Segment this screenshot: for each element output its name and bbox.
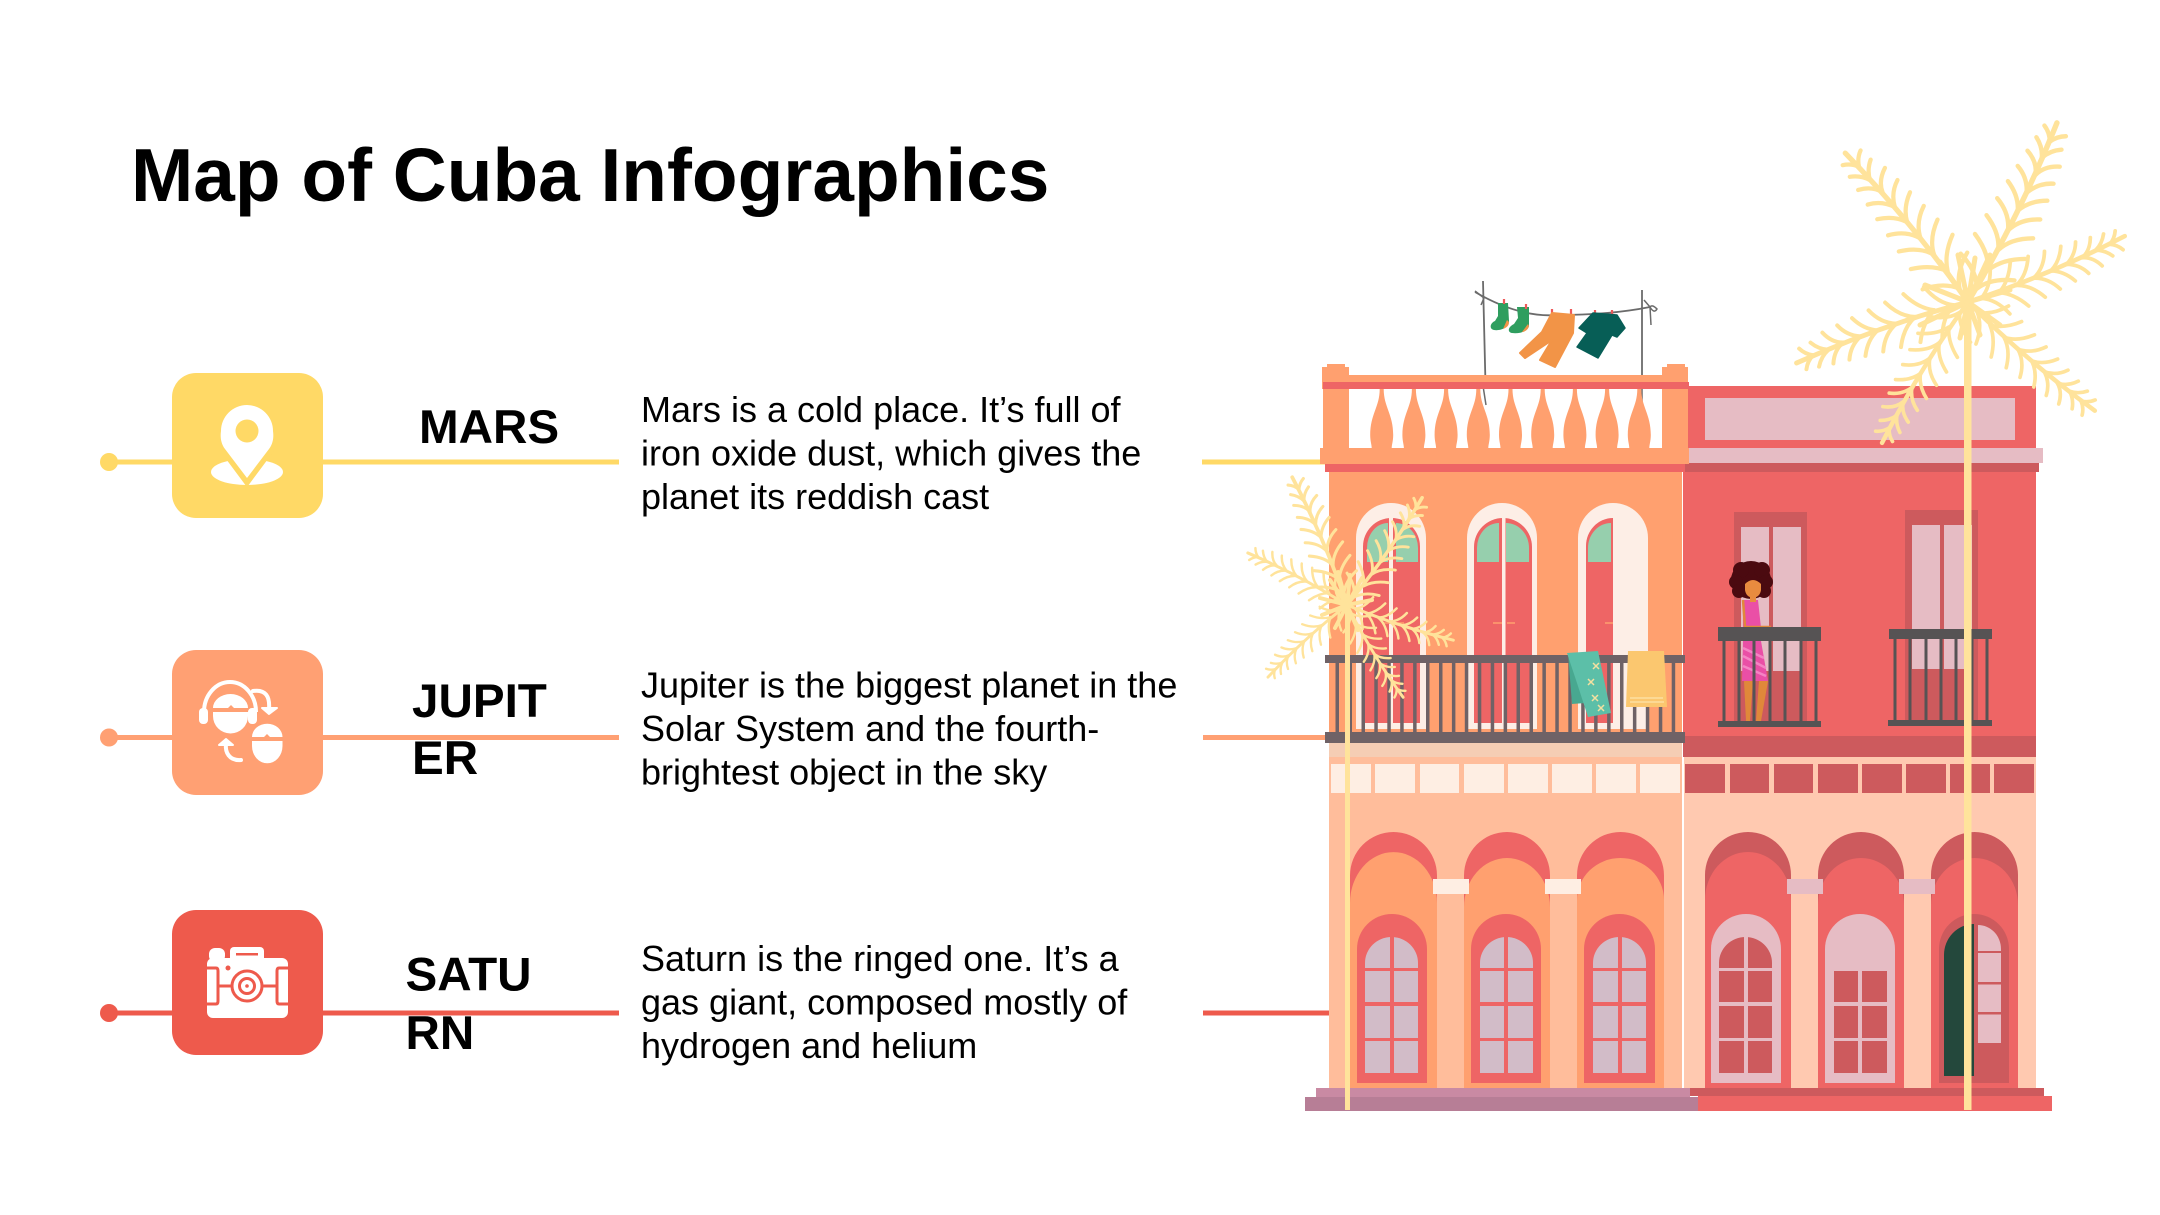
steps	[1305, 1088, 2052, 1111]
arched door 1	[1356, 503, 1426, 729]
icon: headset swap	[172, 650, 323, 795]
orange building: upper floor	[1325, 472, 1685, 743]
heading: Mars: MARS	[419, 401, 559, 454]
text: Mars description: Mars is a cold place. It’s full of	[641, 389, 1122, 430]
text: Jupiter description: Solar System and the fourth-	[641, 708, 1099, 749]
heading: Saturn: RN	[406, 1007, 474, 1060]
balcony railing left	[1718, 627, 1821, 727]
arched window 1	[1711, 914, 1781, 1083]
text: Mars description: planet its reddish cast	[641, 476, 989, 517]
arched window 3	[1584, 914, 1655, 1083]
orange building: balustrade parapet	[1320, 364, 1689, 472]
open door	[1939, 914, 2009, 1083]
heading: Jupiter: ER	[412, 732, 478, 785]
icon: camera	[172, 910, 323, 1055]
towel yellow	[1626, 651, 1667, 707]
palm tree: small	[1241, 468, 1458, 1110]
orange building: ground floor	[1329, 743, 1682, 1088]
arched door 3	[1578, 503, 1648, 729]
text: Saturn description: Saturn is the ringed one. It’s a	[641, 938, 1120, 979]
connector line: Mars left	[100, 453, 619, 471]
heading: Saturn: SATU	[406, 948, 532, 1002]
arched door 2	[1467, 503, 1537, 729]
arches	[1705, 832, 2018, 1088]
balcony railing	[1325, 655, 1685, 743]
connector line: Saturn right	[1203, 1010, 1331, 1016]
text: Jupiter description: brightest object in the sky	[641, 751, 1047, 792]
text: Mars description: iron oxide dust, which gives the	[641, 432, 1141, 473]
clothesline with laundry	[1475, 281, 1657, 412]
connector line: Jupiter right	[1203, 735, 1330, 740]
text: Saturn description: hydrogen and helium	[641, 1025, 977, 1066]
arched window 2	[1471, 914, 1541, 1083]
row: Jupiter	[100, 650, 1177, 795]
balcony railing right	[1888, 629, 1992, 726]
imposts	[1787, 879, 1935, 894]
red building: ground floor	[1684, 757, 2036, 1088]
title: Map of Cuba Infographics	[131, 133, 1049, 217]
text: Saturn description: gas giant, composed mostly of	[641, 981, 1128, 1022]
towel teal	[1567, 651, 1611, 717]
window left	[1734, 512, 1807, 721]
illustration: Cuban building	[1305, 281, 2052, 1111]
imposts	[1433, 879, 1581, 894]
row: Mars	[100, 373, 1141, 518]
palm tree: large	[1787, 110, 2135, 1110]
window right	[1905, 510, 1978, 721]
arched window 1	[1357, 914, 1427, 1083]
heading: Jupiter: JUPIT	[412, 675, 547, 728]
woman on balcony	[1729, 561, 1773, 721]
arches	[1350, 832, 1664, 1088]
row: Saturn	[100, 910, 1128, 1066]
red building: upper floor	[1683, 386, 2043, 757]
connector line: Jupiter left	[100, 728, 619, 746]
text: Jupiter description: Jupiter is the biggest planet in the	[641, 664, 1177, 706]
connector line: Mars right	[1202, 460, 1327, 464]
connector line: Saturn left	[100, 1004, 619, 1022]
icon: map pin	[172, 373, 323, 518]
arched window 2	[1825, 914, 1895, 1083]
